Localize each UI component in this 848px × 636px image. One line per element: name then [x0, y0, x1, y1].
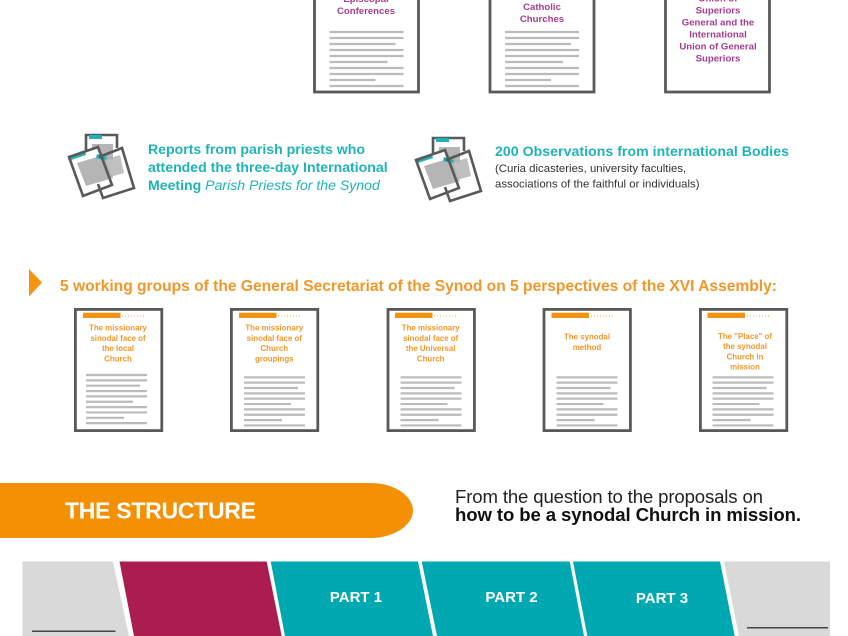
document: Union of Superiors General	[666, 0, 770, 92]
part label: PART 1	[330, 589, 382, 606]
observations detail: (Curia dicasteries, university faculties,	[495, 163, 686, 175]
part label: PART 2	[485, 589, 538, 606]
document title: sinodal face of	[90, 334, 146, 343]
icon: document stack, observations	[416, 138, 481, 201]
document text lines	[400, 377, 462, 425]
document title: sinodal face of	[403, 334, 459, 343]
panel: right grey section	[724, 562, 830, 636]
document title: Superiors	[696, 54, 740, 64]
document text lines	[86, 375, 147, 423]
document title: Conferences	[337, 6, 395, 17]
document title: The missionary	[402, 324, 460, 332]
document: synodal method	[544, 309, 630, 431]
document title: Church	[417, 354, 445, 364]
document title: Church in	[727, 352, 764, 362]
document title: General and the	[682, 18, 754, 28]
document title: mission	[730, 362, 760, 372]
document title: the local	[102, 344, 134, 353]
observations detail: associations of the faithful or individuals)	[495, 178, 700, 190]
document: Church groupings	[231, 309, 318, 431]
icon: document stack, parish priests	[69, 135, 134, 198]
orange tab	[395, 313, 432, 318]
panel: crimson section	[120, 562, 282, 636]
panel: part 2	[422, 562, 584, 636]
document title: The synodal	[564, 332, 610, 342]
document title: Catholic	[523, 2, 562, 13]
text: reports from parish priests: attended the three-day International	[148, 159, 388, 175]
panel: left grey section	[22, 562, 129, 636]
observations heading: 200 Observations from international Bodies	[495, 143, 789, 159]
document text lines	[505, 32, 579, 86]
arrow: orange marker	[29, 269, 42, 296]
document title: The "Place" of	[718, 332, 772, 341]
document title: The missionary	[89, 324, 148, 332]
panel: part 3	[573, 562, 735, 636]
heading: working groups: 5 working groups of the General Secretariat of the Synod on 5 perspectives of the XVI Assembly:	[60, 278, 777, 295]
document title: the Universal	[406, 344, 455, 353]
document text lines	[244, 377, 305, 425]
document title: sinodal face of	[247, 334, 302, 343]
document text lines	[712, 377, 774, 425]
document title: International	[689, 30, 747, 40]
document title: Church	[260, 344, 288, 353]
orange tab	[239, 313, 276, 318]
part label: PART 3	[636, 590, 688, 607]
document: Episcopal Conferences	[314, 0, 418, 92]
document title: The missionary	[245, 324, 304, 332]
document: Catholic Churches	[490, 0, 594, 92]
rule	[747, 627, 828, 628]
document title: Churches	[520, 14, 564, 25]
orange tab	[83, 313, 120, 318]
text: reports from parish priests: Meeting	[148, 177, 205, 193]
text: reports from parish priests: Reports from parish priests who	[148, 141, 365, 157]
banner title: THE STRUCTURE	[65, 498, 256, 524]
document: Place of the synodal Church	[700, 309, 787, 431]
banner: the structure	[0, 483, 413, 538]
text: reports from parish priests: Parish Priests for the Synod	[205, 177, 381, 193]
text: from the question to the proposals	[455, 486, 801, 525]
intro line: From the question to the proposals on	[455, 486, 763, 507]
document title: Union of General	[679, 42, 757, 52]
document text lines	[556, 377, 618, 425]
document title: Superiors	[696, 6, 740, 16]
orange tab	[708, 313, 745, 318]
document: Universal Church	[388, 309, 474, 431]
document title: groupings	[255, 354, 294, 364]
document: local Church	[75, 309, 162, 431]
document title: method	[573, 343, 601, 352]
orange tab	[552, 313, 589, 318]
document text lines	[330, 32, 404, 86]
text: observations from international bodies	[495, 143, 789, 190]
document title: the synodal	[723, 342, 767, 351]
rule	[32, 630, 116, 632]
panel: part 1	[271, 562, 433, 636]
emphasised line: how to be a synodal Church in mission.	[455, 504, 801, 525]
document title: Church	[104, 354, 132, 364]
